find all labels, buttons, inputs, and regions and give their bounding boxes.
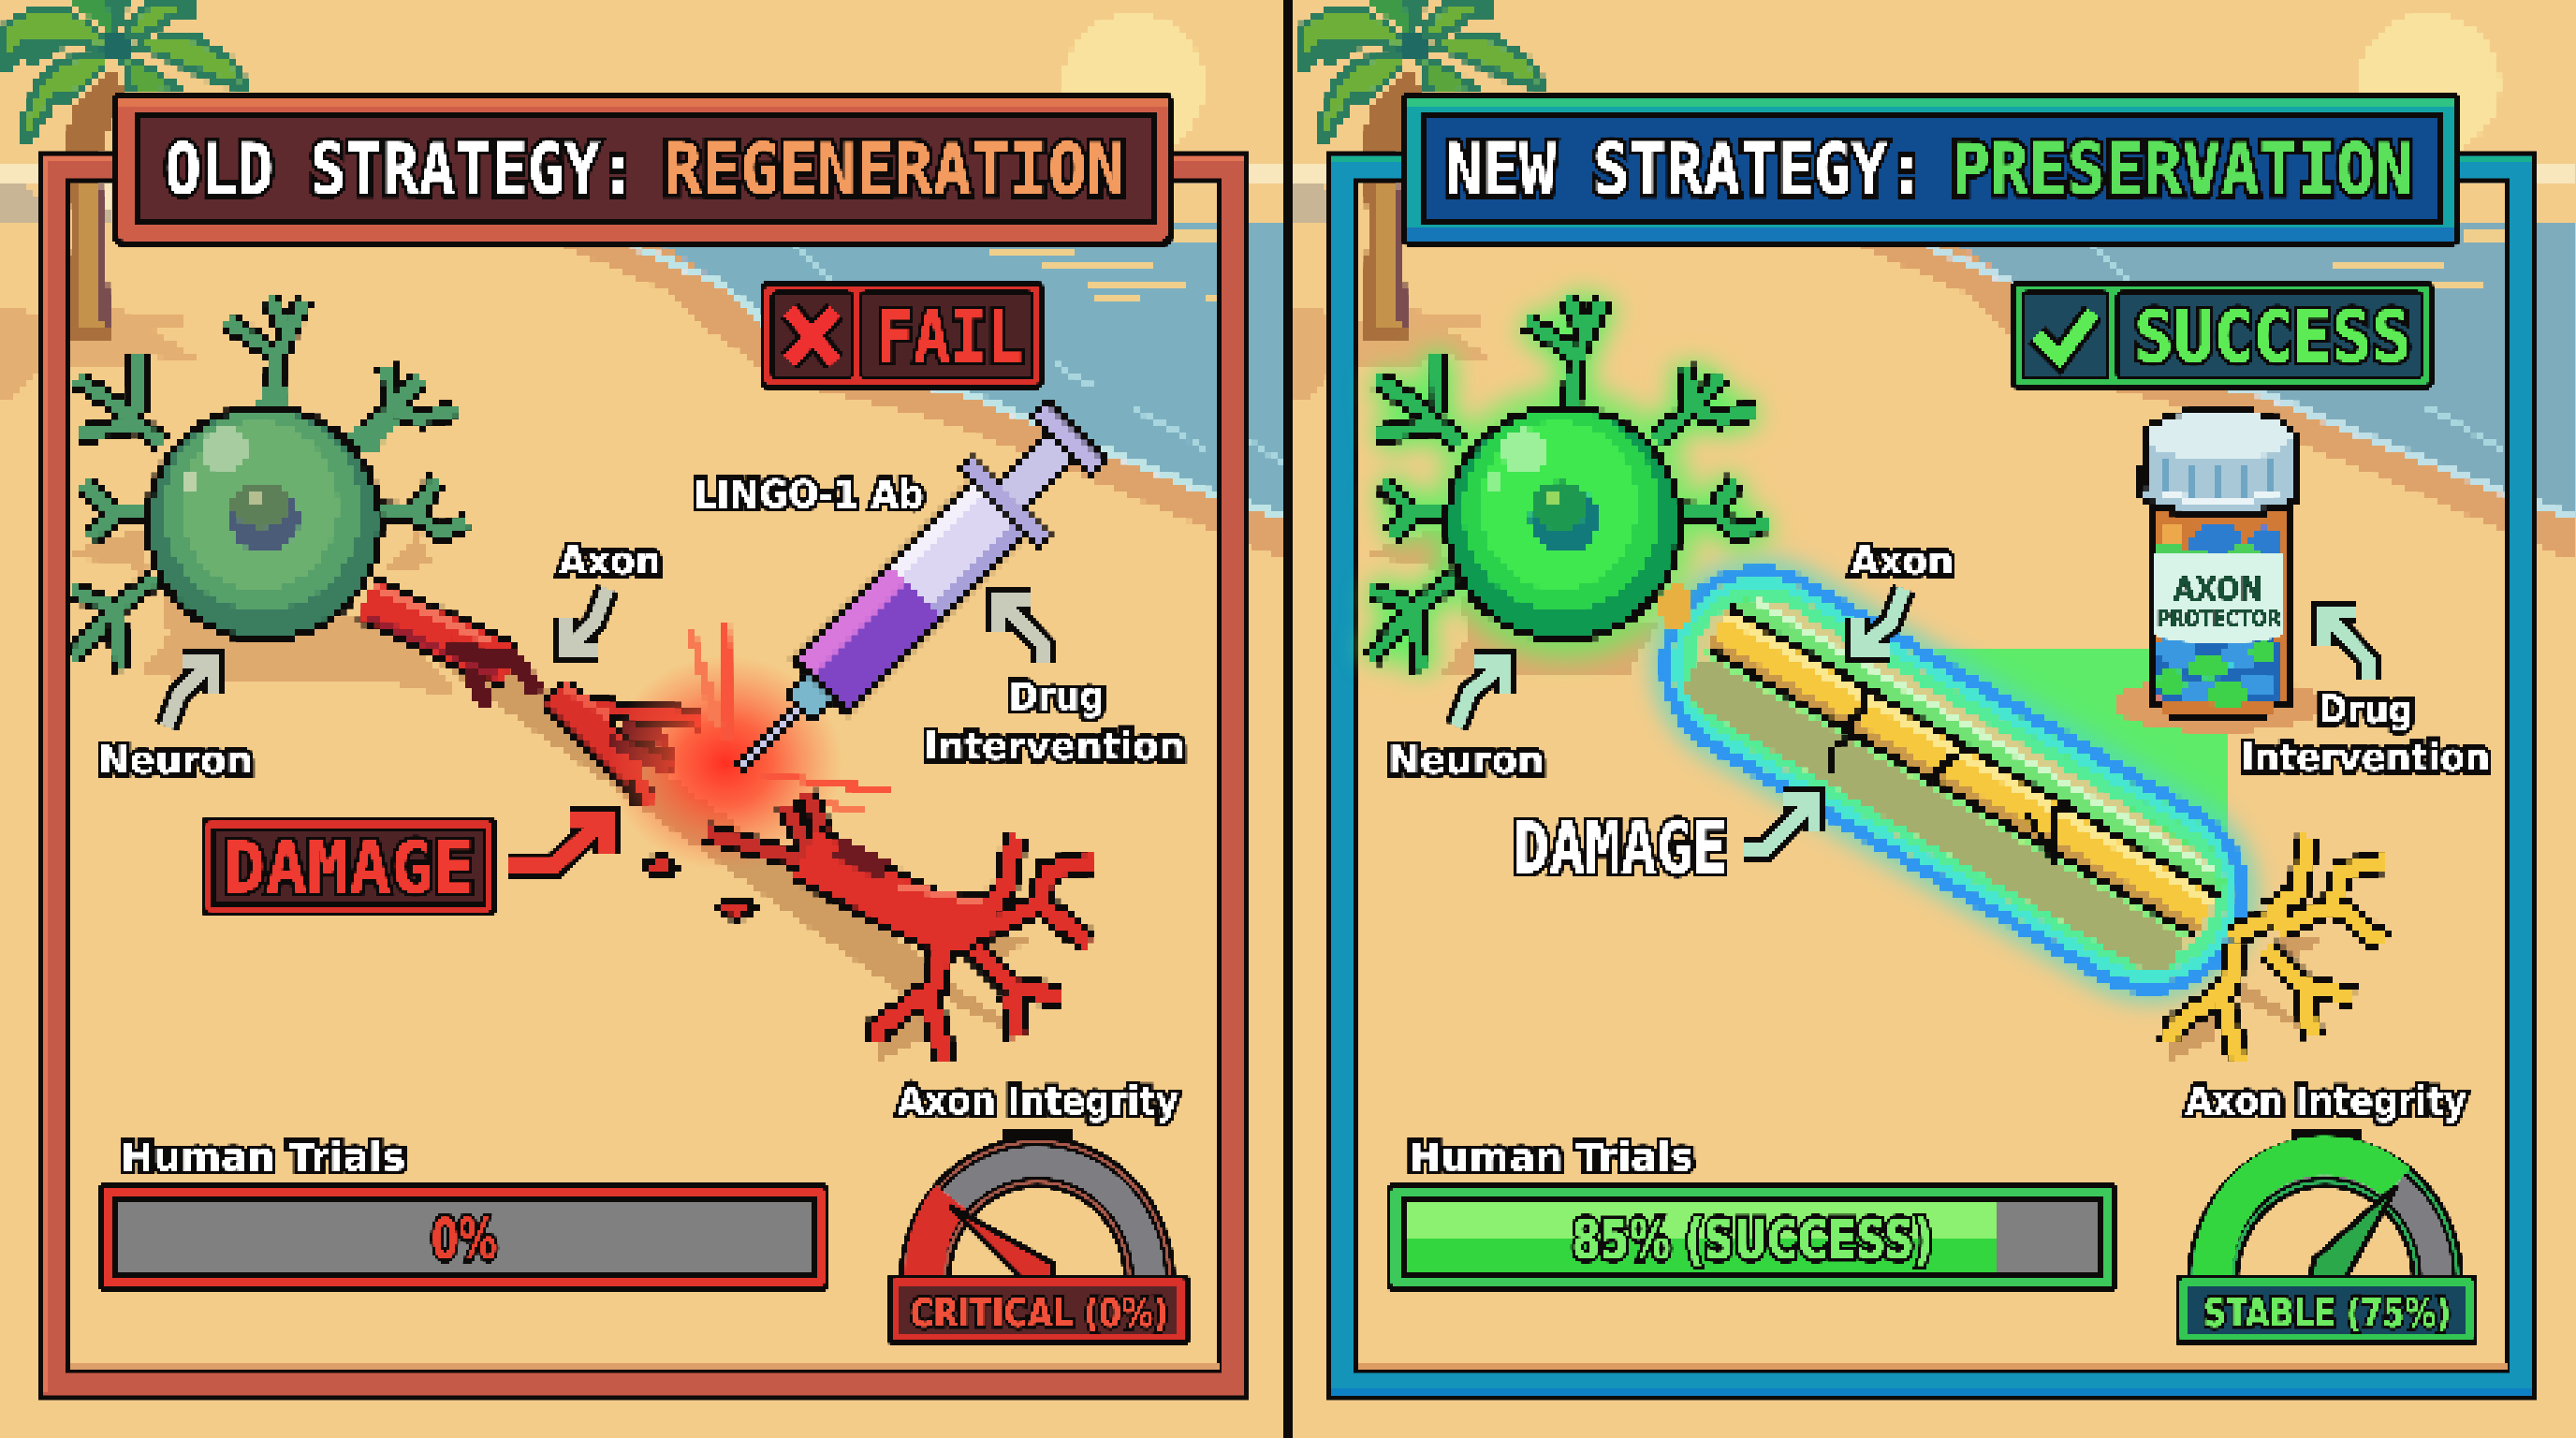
axon: right preserved [1660,584,2220,975]
capsule glow [1632,536,2277,1023]
header: new strategy: NEW STRATEGY: [1445,127,1925,211]
label: drug intervention right: Intervention [2241,735,2490,780]
panel: new strategy preservation [1331,92,2532,1396]
red damage burst [608,622,891,871]
panel: old strategy regeneration [43,92,1244,1392]
header: new strategy: PRESERVATION [1952,127,2413,211]
ground shadow: right neuron [1369,529,2328,1063]
neuron: left damaged [72,298,468,671]
gauge: axon integrity stable [2175,1078,2478,1345]
progress bar: human trials 0%: 0% [432,1207,497,1272]
label: LINGO-1 Ab: LINGO-1 Ab [694,472,924,517]
arrow: neuron pointer right [1456,662,1505,726]
gauge: axon integrity critical: CRITICAL (0%) [910,1290,1168,1336]
header: old strategy: REGENERATION [664,127,1125,211]
progress bar: human trials 0%: Human Trials [121,1135,405,1180]
background: right beach scene [1288,0,2576,1438]
badge: fail [760,281,1044,389]
header: new strategy [1400,92,2461,246]
badge: damage: DAMAGE [224,826,475,909]
ground shadow: left neuron and axon [70,529,1034,1063]
bottle shadow and body [2114,496,2323,732]
bottle label: AXON [2174,571,2263,609]
background: left beach scene [0,0,1288,1438]
arrow: damage pointer left [509,819,607,866]
header: old strategy [112,92,1173,246]
progress bar: human trials 0% [98,1135,829,1292]
gauge: axon integrity stable: STABLE (75%) [2203,1290,2451,1336]
arrow: axon pointer right [1858,589,1904,651]
label: drug intervention left: Drug [1009,674,1105,719]
terminal branches: right [2171,836,2386,1061]
label: damage right: DAMAGE [1514,806,1728,889]
label: drug intervention right [2241,687,2490,780]
bottle cap [2136,406,2303,519]
arrow: drug pointer right [2323,612,2368,679]
progress bar: human trials 85%: Human Trials [1409,1135,1693,1180]
gauge: axon integrity stable: Axon Integrity [2186,1078,2466,1123]
label: drug intervention right: Drug [2319,687,2413,732]
panel frame: right [1331,156,2532,1396]
panel frame: left [43,156,1244,1392]
icon: right palm tree [1297,0,1547,339]
gauge: axon integrity critical: Axon Integrity [898,1078,1178,1123]
label: neuron right: Neuron [1388,738,1544,783]
badge: success [2011,281,2434,389]
arrow: drug pointer left [999,599,1044,662]
label: drug intervention left: Intervention [924,724,1185,769]
arrow: damage pointer right [1744,800,1814,850]
header: old strategy: OLD STRATEGY: [165,127,637,211]
axon: left distal segment with terminal branches [707,794,1092,1061]
label: drug intervention left [924,674,1185,769]
icon: syringe [698,388,1120,809]
bottle label: PROTECTOR [2157,606,2281,632]
label: axon right: Axon [1851,538,1954,583]
badge: success: SUCCESS [2134,295,2411,378]
glow shield background green [1933,649,2226,871]
neuron: right healthy [1371,298,1767,671]
axon: left broken fragment [552,685,702,803]
neuron glow right [1371,298,1767,671]
capsule: protective shield around axon [1632,536,2277,1023]
gauge: axon integrity critical [887,1078,1190,1345]
arrow: axon pointer left [566,589,607,651]
progress bar: human trials 85% [1386,1135,2117,1292]
bottle label [2153,552,2284,643]
debris: left axon fragments [643,854,757,921]
icon: axon protector pill bottle [2114,406,2323,732]
label: neuron left: Neuron [98,738,253,783]
label: axon left: Axon [559,538,661,583]
badge: fail: FAIL [877,295,1023,378]
axon: left proximal segment [367,586,538,707]
arrow: neuron pointer left [167,662,213,726]
progress bar: human trials 85%: 85% (SUCCESS) [1572,1208,1933,1271]
center divider [1283,0,1293,1438]
icon: left palm tree [0,0,250,339]
